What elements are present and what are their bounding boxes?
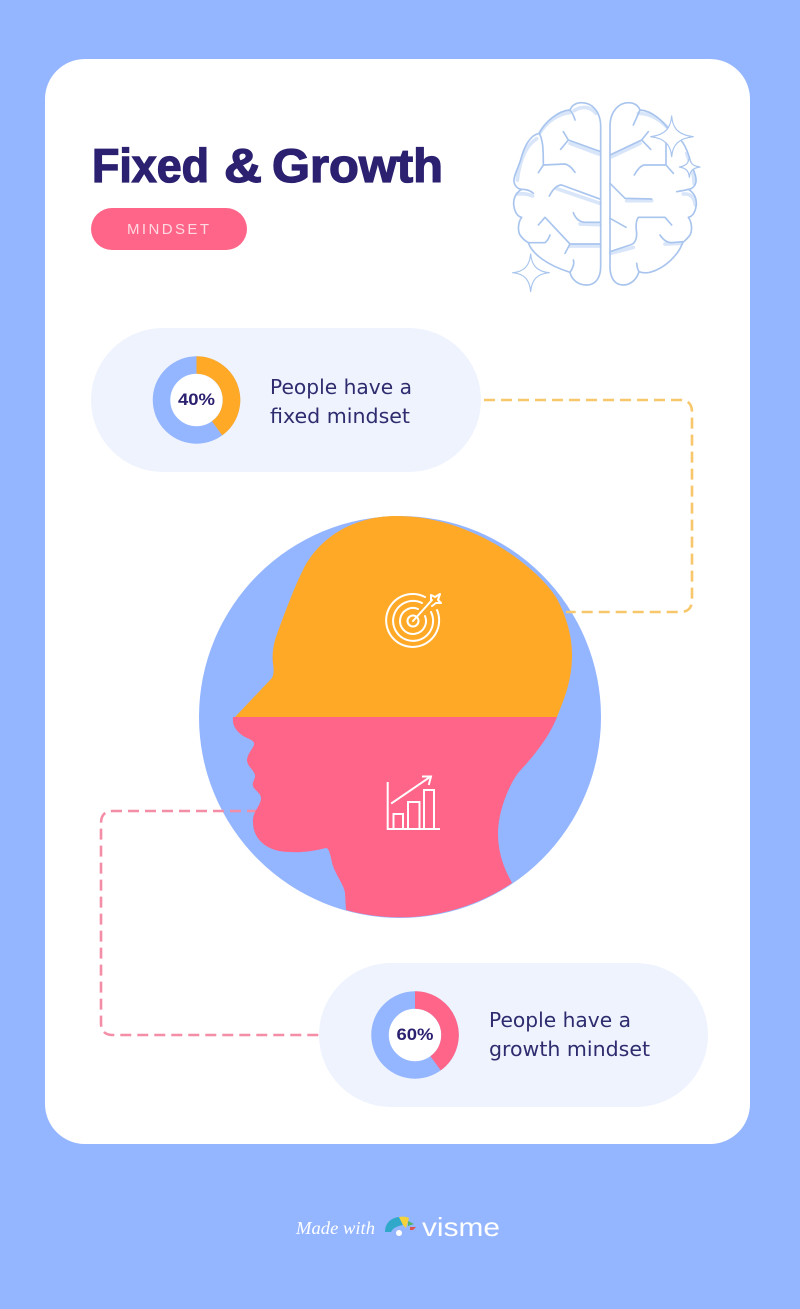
donut chart: 40% <box>162 365 232 435</box>
footer: made with visme: visme <box>422 1212 500 1242</box>
head: lower pink half <box>233 717 557 917</box>
icon: visme logo <box>385 1217 416 1236</box>
icon: growth bar chart <box>388 776 439 829</box>
connector: pink dashed <box>101 811 319 1035</box>
subtitle badge: mindset <box>91 208 247 250</box>
text: growth mindset: People have a <box>489 1008 631 1032</box>
title: & <box>224 139 262 192</box>
text: growth mindset: growth mindset <box>489 1037 650 1061</box>
head circle background <box>199 516 601 918</box>
panel: growth mindset stat <box>319 963 708 1107</box>
subtitle badge: mindset: MINDSET <box>127 221 209 238</box>
text: fixed mindset: People have a <box>270 375 412 399</box>
brain right hemisphere <box>610 103 696 285</box>
donut chart: 60% <box>380 1000 450 1070</box>
text: fixed mindset: fixed mindset <box>270 404 410 428</box>
brain left hemisphere <box>514 103 601 285</box>
panel: fixed mindset stat <box>91 328 481 472</box>
icon: brain with sparkles <box>513 103 700 292</box>
donut chart: 40%: 40% <box>178 390 215 409</box>
title: Fixed <box>92 139 209 192</box>
donut chart: 60%: 60% <box>396 1025 434 1044</box>
footer: made with visme <box>295 1212 500 1242</box>
title: Growth <box>272 139 443 192</box>
connector: orange dashed <box>484 400 692 612</box>
footer: made with visme: Made with <box>295 1218 375 1238</box>
panel: white card <box>45 59 750 1144</box>
icon: target with arrow <box>386 594 441 647</box>
head: upper orange half <box>235 516 572 717</box>
